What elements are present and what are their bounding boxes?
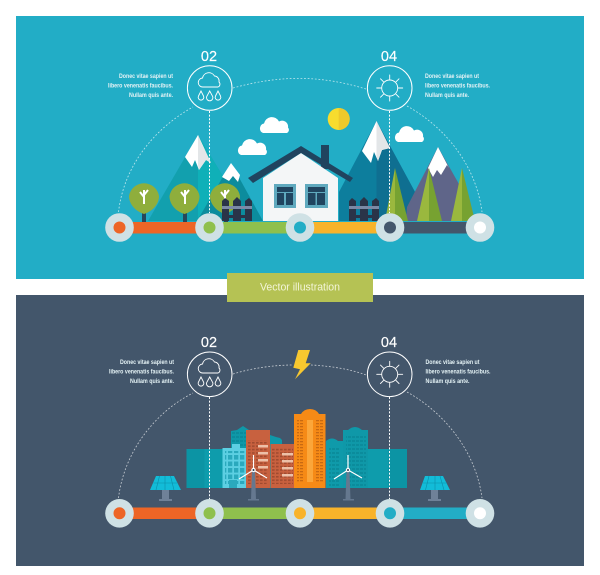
text: right caption: Nullam quis ante. — [425, 92, 469, 99]
clouds — [238, 117, 424, 155]
icon: sun — [328, 108, 350, 130]
text: left caption: Nullam quis ante. — [130, 378, 174, 385]
text: right caption: Nullam quis ante. — [426, 378, 470, 385]
text: right caption: Donec vitae sapien ut — [426, 359, 480, 366]
house — [248, 145, 353, 221]
text: right caption — [425, 73, 490, 99]
text: right caption — [426, 359, 491, 385]
text: left caption — [108, 73, 173, 99]
dashed arc — [118, 365, 482, 499]
text: left caption: Nullam quis ante. — [129, 92, 173, 99]
heading: 02: 02 — [201, 49, 217, 65]
heading: 04: 04 — [381, 49, 397, 65]
text: left caption: libero venenatis faucibus. — [109, 368, 174, 376]
heading: 04: 04 — [381, 335, 397, 351]
panel: countryside — [16, 16, 584, 279]
icon: rain cloud — [187, 352, 232, 397]
text: right caption: Donec vitae sapien ut — [425, 73, 479, 80]
mountain: purple — [406, 147, 470, 221]
text: right caption: libero venenatis faucibus. — [426, 368, 491, 376]
wind turbine: left — [239, 455, 267, 500]
text: left caption: Donec vitae sapien ut — [120, 359, 174, 366]
pine trees — [385, 168, 475, 221]
timeline — [105, 213, 494, 242]
mountain: left small — [197, 163, 263, 221]
buildings — [186, 409, 407, 488]
text: right caption: libero venenatis faucibus. — [425, 82, 490, 90]
timeline — [105, 499, 494, 528]
dashed arc — [118, 78, 482, 213]
icon: rain cloud — [187, 66, 232, 110]
icon: sun outline — [367, 66, 412, 110]
icon: sun outline — [367, 352, 412, 397]
fence: right — [349, 197, 379, 221]
fence: left — [222, 197, 252, 221]
text: left caption — [109, 359, 174, 385]
icon: lightning bolt — [293, 350, 311, 379]
banner — [227, 273, 373, 302]
mountain: left large — [148, 135, 250, 221]
mountain: dark blue — [339, 121, 415, 221]
text: left caption: Donec vitae sapien ut — [119, 73, 173, 80]
heading: 02: 02 — [201, 335, 217, 351]
trees — [129, 183, 240, 222]
banner: Vector illustration — [260, 282, 340, 294]
wind turbine: right — [334, 455, 362, 500]
solar panel: left — [150, 476, 181, 501]
panel: city — [16, 295, 584, 566]
text: left caption: libero venenatis faucibus. — [108, 82, 173, 90]
solar panel: right — [420, 476, 450, 501]
